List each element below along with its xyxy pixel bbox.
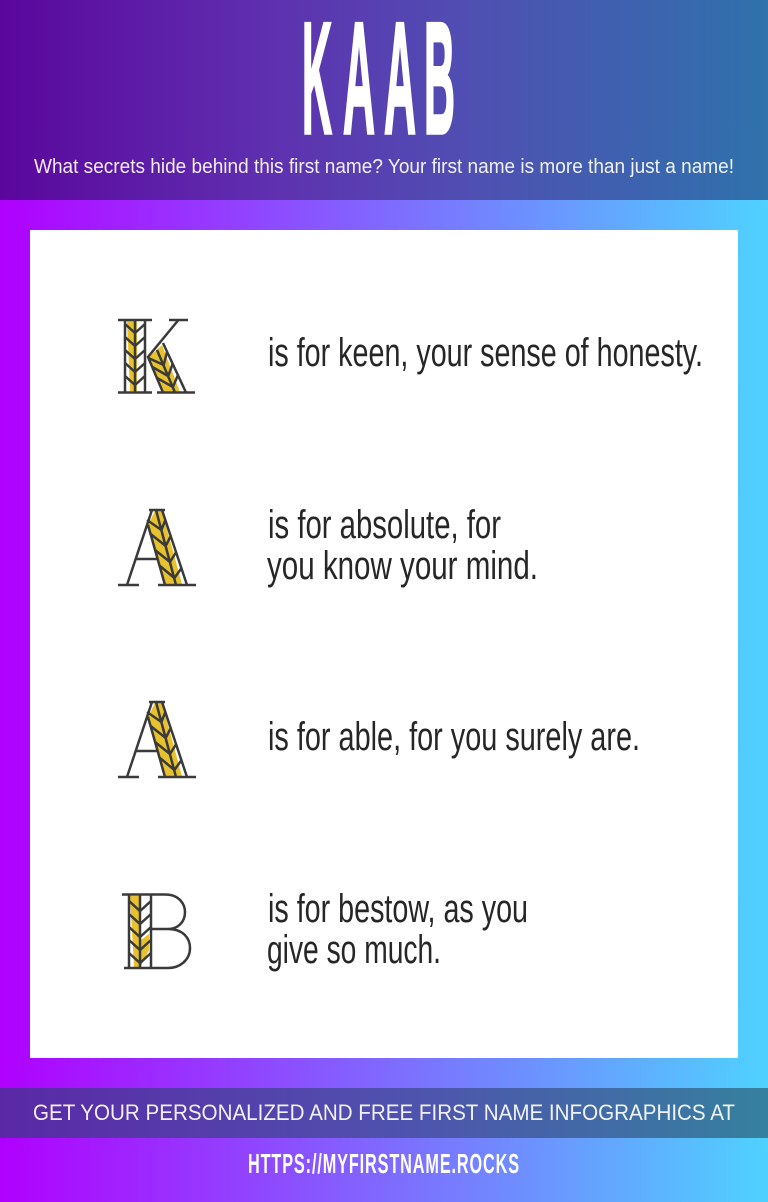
footer url: HTTPS://MYFIRSTNAME.ROCKS <box>248 1148 520 1179</box>
header band <box>0 0 768 200</box>
icon: letter A <box>118 510 196 585</box>
icon: letter K <box>118 320 195 392</box>
panel: letters card <box>30 230 738 1058</box>
subtitle: What secrets hide behind this first name? Your first name is more than just a name! <box>34 156 734 178</box>
icon: letter A second <box>118 702 196 777</box>
footer band <box>0 1088 768 1138</box>
row: second A <box>118 702 640 777</box>
text: A line one: is for absolute, for <box>268 503 501 547</box>
text: A line two: you know your mind. <box>267 544 538 588</box>
text: B line one: is for bestow, as you <box>268 887 528 931</box>
row: A <box>118 503 538 588</box>
row: K <box>118 320 703 392</box>
icon: letter B <box>122 894 190 968</box>
footer text: GET YOUR PERSONALIZED AND FREE FIRST NAME INFOGRAPHICS AT <box>33 1100 735 1125</box>
row: B <box>122 887 528 972</box>
text: B line two: give so much. <box>267 928 441 972</box>
